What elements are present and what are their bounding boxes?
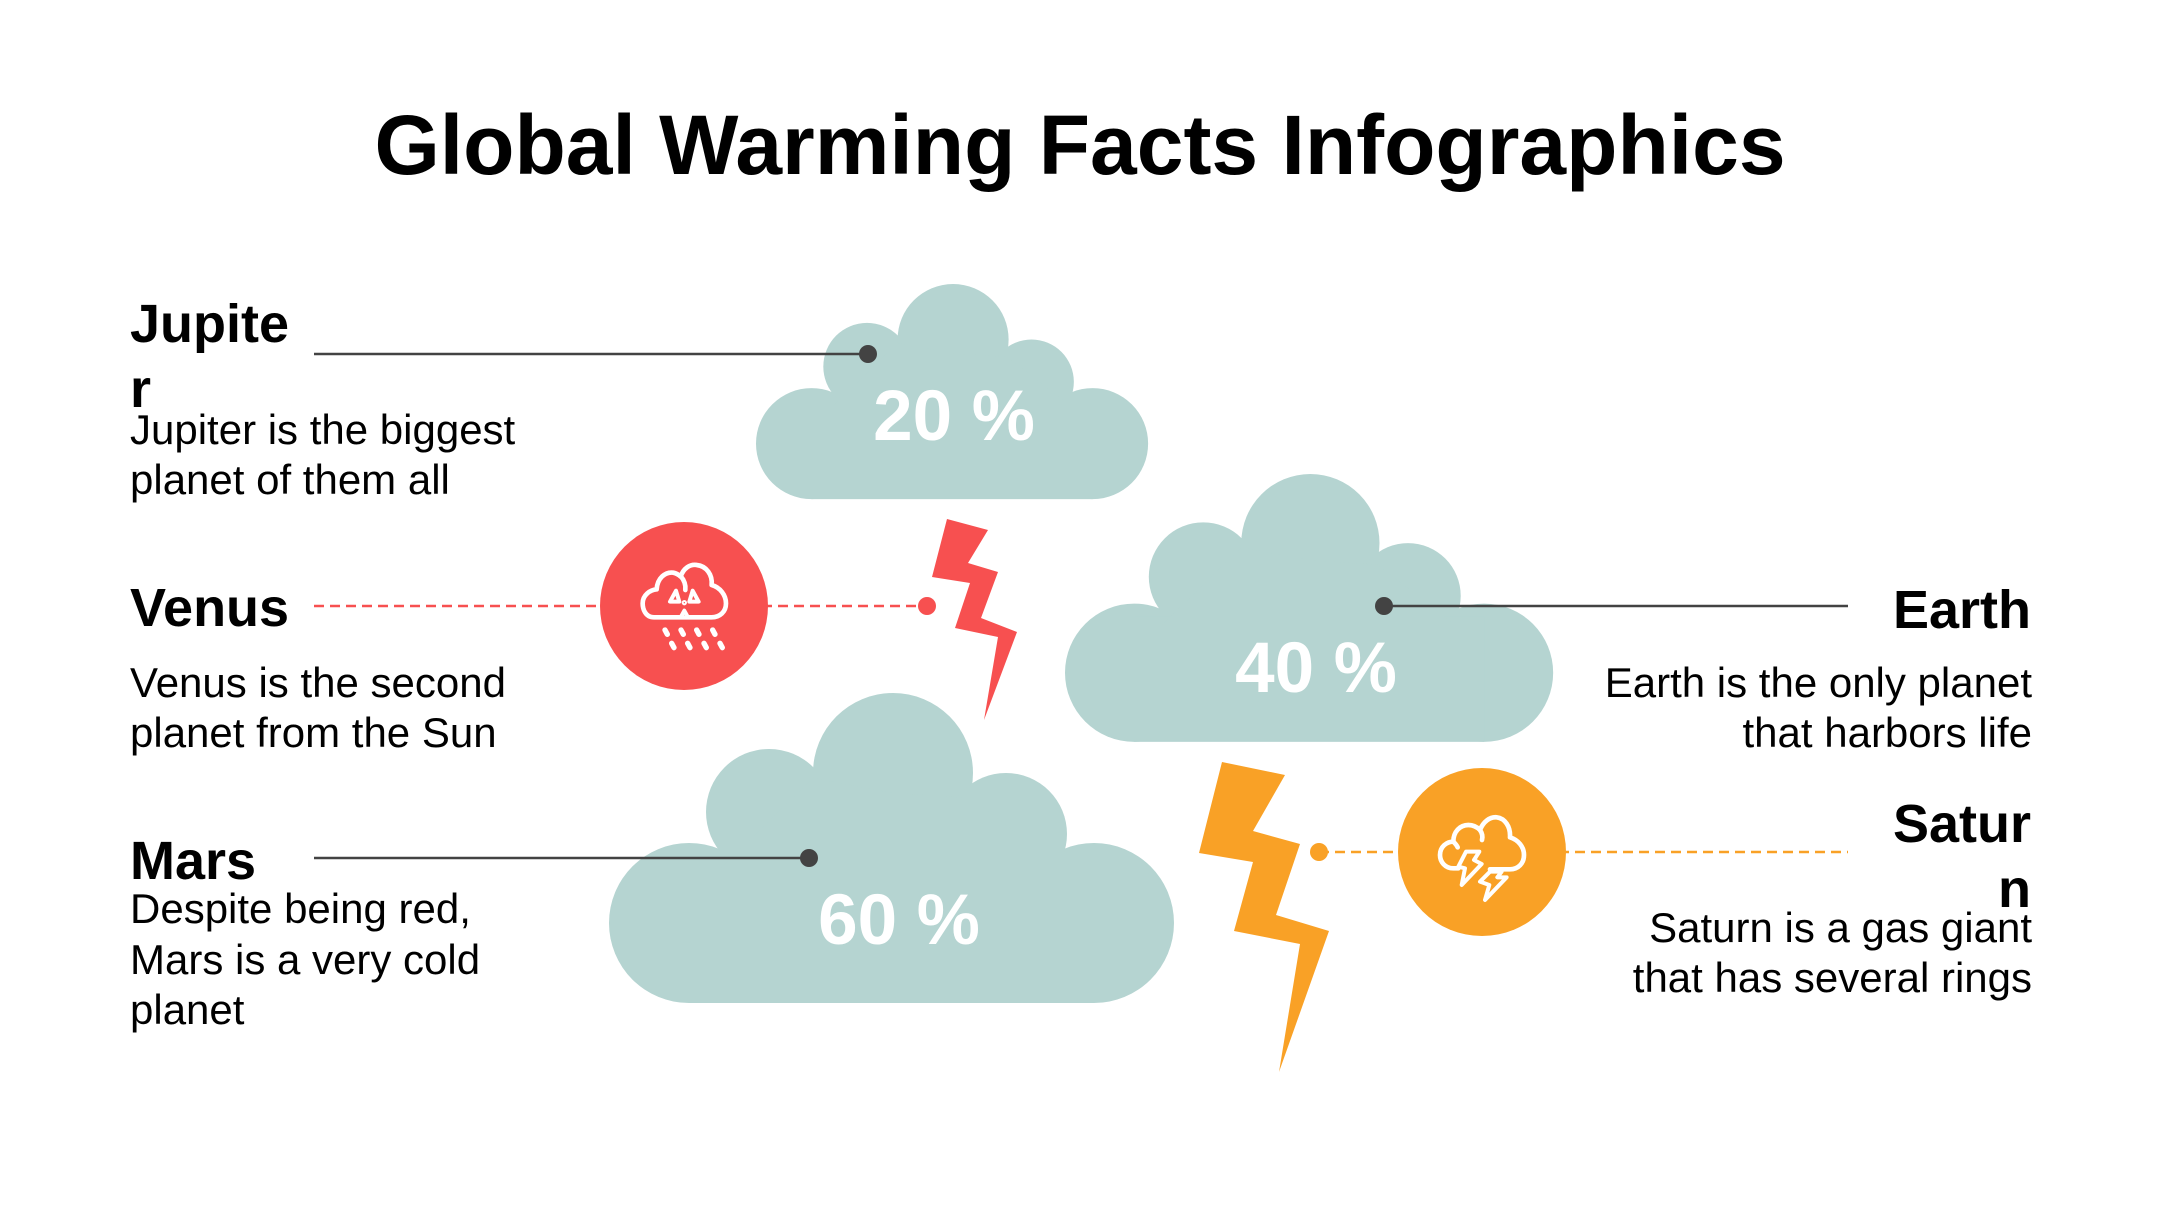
- connector: Mars: [314, 849, 818, 867]
- cloud: 60 percent: [609, 693, 1174, 1003]
- Venus description: planet from the Sun: [130, 709, 497, 756]
- Earth description: Earth is the only planet: [1605, 659, 2032, 706]
- Jupiter description: Jupiter is the biggest: [130, 406, 516, 453]
- Jupiter heading: r: [130, 359, 151, 419]
- Mars description: planet: [130, 986, 245, 1033]
- connector: Jupiter: [314, 345, 877, 363]
- Venus heading: Venus: [130, 578, 289, 638]
- percent label: 40: 40 %: [1235, 629, 1397, 708]
- cloud: 40 percent: [1065, 474, 1553, 742]
- Mars description: Mars is a very cold: [130, 936, 480, 983]
- Earth description: that harbors life: [1742, 709, 2032, 756]
- connector: Earth: [1375, 597, 1848, 615]
- percent label: 60: 60 %: [818, 881, 980, 960]
- Earth heading: Earth: [1893, 580, 2031, 640]
- cloud: 20 percent: [756, 284, 1148, 499]
- Jupiter heading: Jupite: [130, 294, 289, 354]
- title: Global Warming Facts Infographics: [374, 98, 1786, 192]
- Venus description: Venus is the second: [130, 659, 506, 706]
- icon: radioactive rain cloud: [600, 522, 768, 690]
- Saturn description: Saturn is a gas giant: [1649, 904, 2032, 951]
- orange lightning bolt: [1199, 762, 1329, 1072]
- percent label: 20: 20 %: [873, 377, 1035, 456]
- Mars heading: Mars: [130, 831, 256, 891]
- Saturn heading: Satur: [1893, 794, 2031, 854]
- red lightning bolt: [932, 519, 1017, 720]
- connector: Saturn: [1310, 843, 1848, 861]
- Saturn description: that has several rings: [1633, 954, 2032, 1001]
- Saturn heading: n: [1998, 859, 2031, 919]
- connector: Venus: [314, 597, 936, 615]
- Mars description: Despite being red,: [130, 885, 471, 932]
- icon: thunderstorm cloud: [1398, 768, 1566, 936]
- Jupiter description: planet of them all: [130, 456, 450, 503]
